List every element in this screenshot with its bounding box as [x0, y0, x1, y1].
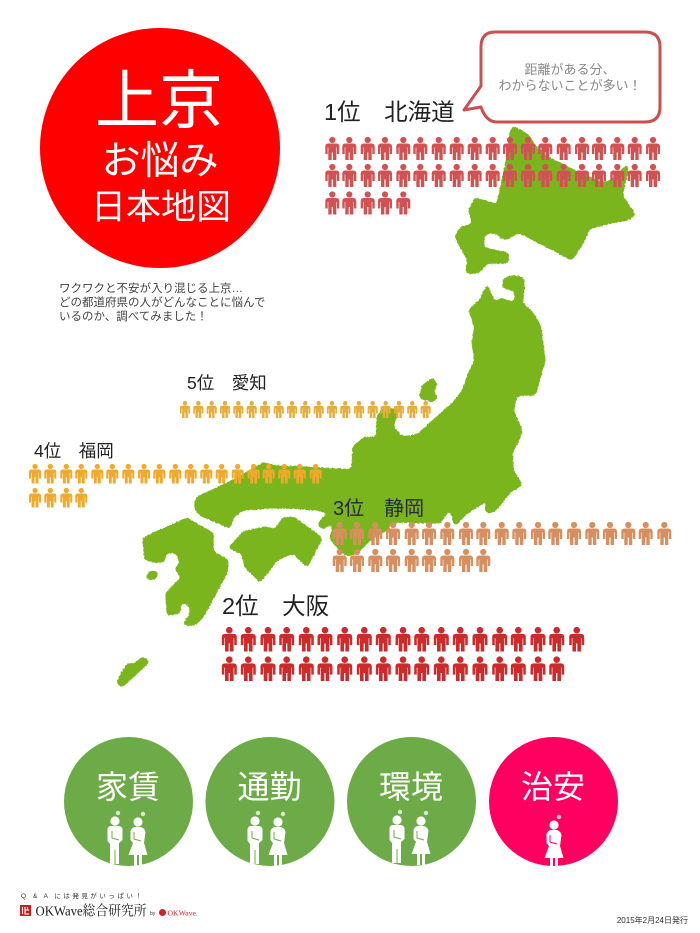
category: rent: 家賃 — [96, 769, 160, 805]
intro text: いるのか、調べてみました！ — [59, 310, 208, 323]
publication date: 2015年2月24日発行 — [617, 915, 688, 925]
rank 3 label: 3位 静岡 — [333, 497, 424, 520]
rank 1 pictogram rows — [325, 137, 660, 214]
Honshu — [194, 276, 545, 556]
rank 2 label: 2位 大阪 — [222, 593, 329, 619]
map of Japan — [117, 126, 635, 687]
Okinawa — [117, 657, 149, 687]
Awaji island — [318, 516, 332, 529]
title badge — [40, 28, 280, 268]
rank 2 pictogram rows — [222, 627, 584, 681]
speech bubble: わからないことが多い！ — [498, 78, 642, 93]
title: onayami: お悩み — [101, 140, 219, 183]
title: Joukyou: 上京 — [95, 65, 223, 137]
rank 5 pictogram row — [180, 401, 431, 418]
rank 1 label: 1位 北海道 — [324, 99, 455, 125]
OKWave logo: by — [150, 911, 156, 917]
category: environment — [347, 737, 476, 866]
speech bubble: 距離がある分、 — [524, 62, 616, 77]
category: commute: 通勤 — [237, 769, 302, 805]
category: commute — [206, 737, 334, 866]
Shikoku — [229, 517, 322, 582]
category: public safety: 治安 — [521, 769, 585, 805]
rank 5 label: 5位 愛知 — [187, 373, 267, 393]
rank 4 pictogram rows — [29, 464, 322, 508]
rank 4 label: 4位 福岡 — [34, 441, 114, 461]
OKWave logo — [20, 891, 198, 920]
intro text — [59, 281, 265, 323]
speech bubble — [464, 32, 660, 122]
intro text: ワクワクと不安が入り混じる上京… — [59, 281, 243, 295]
rank 3 pictogram rows — [333, 522, 671, 572]
Kyushu — [143, 518, 228, 625]
Sado island — [420, 378, 438, 402]
Goto island — [147, 570, 158, 580]
Hokkaido — [455, 126, 635, 273]
category: public safety — [489, 737, 618, 869]
OKWave logo: OKWave総合研究所 — [36, 902, 146, 920]
title: Japan map: 日本地図 — [91, 188, 231, 227]
category: rent — [64, 737, 193, 866]
OKWave logo: OKWave. — [168, 908, 198, 918]
category: environment: 環境 — [379, 769, 443, 805]
intro text: どの都道府県の人がどんなことに悩んで — [59, 295, 265, 309]
OKWave logo: Q & A には発見がいっぱい！ — [21, 891, 144, 900]
